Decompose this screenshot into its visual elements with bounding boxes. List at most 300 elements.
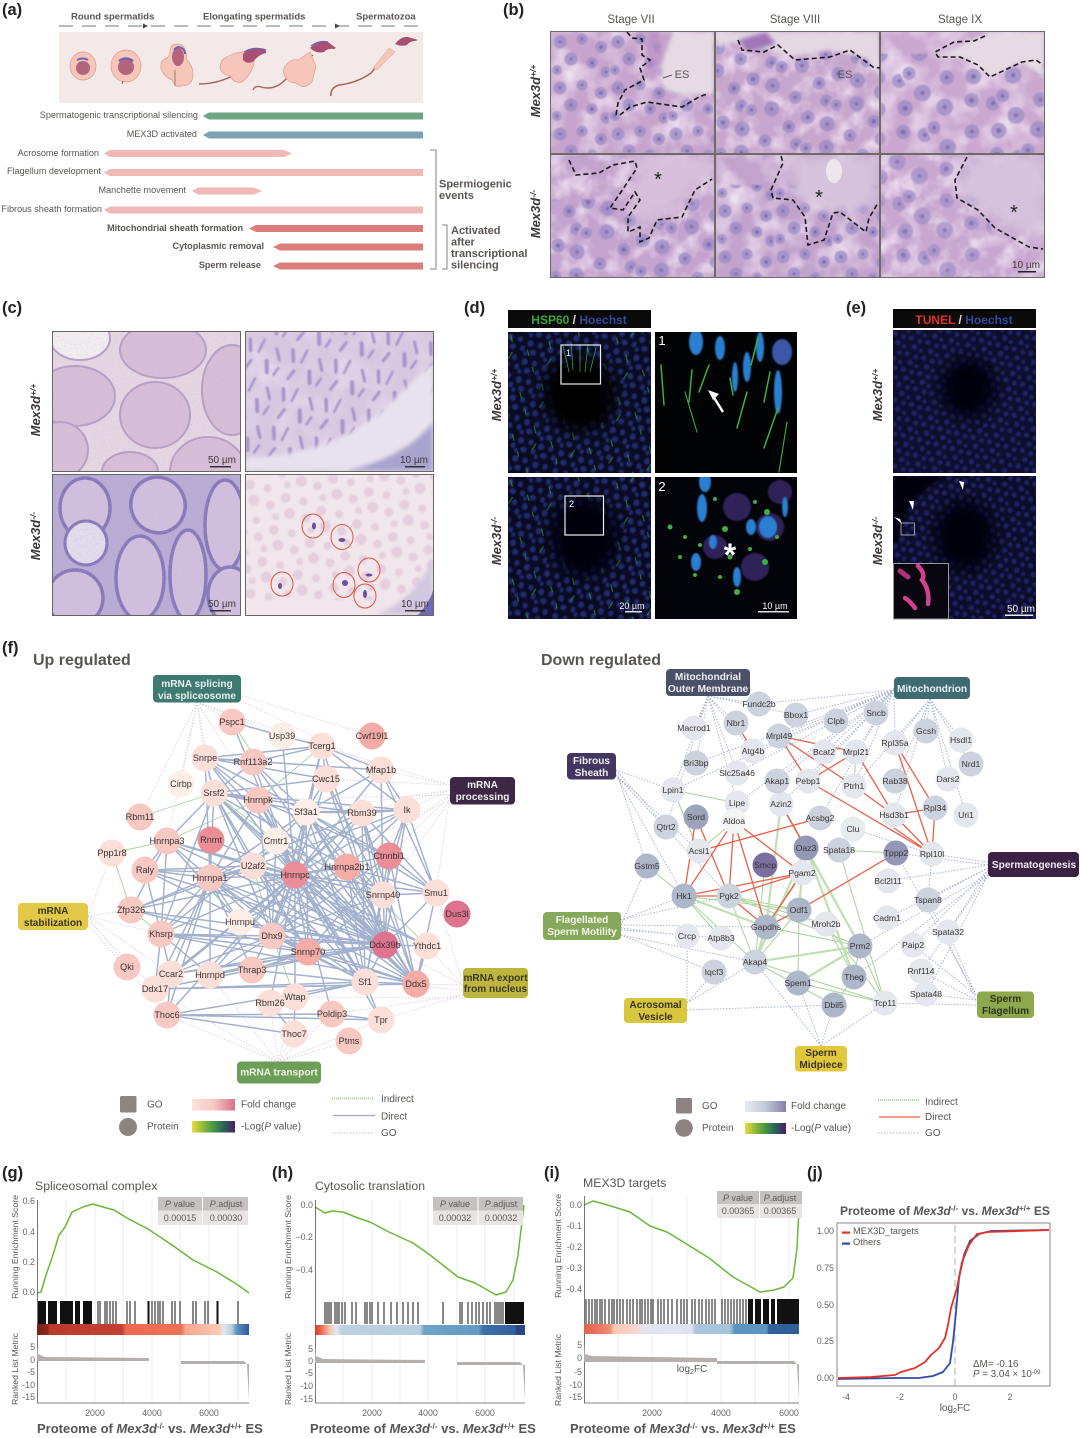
genotype labels [28, 384, 43, 560]
legend: up regulated: -Log(P value) [241, 1122, 301, 1132]
bracket labels: silencing [451, 260, 499, 272]
panel frames [550, 32, 1044, 278]
GO tag: mRNA splicing: mRNA splicing [161, 679, 233, 690]
panel label (c): (c) [2, 299, 22, 317]
ranking colour bar [315, 1325, 525, 1335]
legend: up regulated [119, 1094, 414, 1139]
protein nodes: Iqcf3 [705, 967, 724, 977]
protein nodes: Gapdhs [751, 922, 781, 932]
micrograph: wild type [893, 330, 1036, 473]
ranked list metric: -15 [300, 1394, 313, 1404]
arrowheads [894, 481, 964, 524]
protein nodes: U2af2 [241, 861, 265, 871]
protein nodes: Hnrnpk [243, 795, 273, 805]
x-axis title: ES [242, 1421, 263, 1436]
panel c: testis and epididymis histology [28, 316, 434, 626]
GO tag: spermatogenesis: Spermatogenesis [992, 860, 1076, 871]
stage headings [71, 12, 416, 22]
stain header: HSP60 / Hoechst [531, 313, 627, 327]
panel h: GSEA cytosolic translation [283, 1179, 536, 1436]
panel g: GSEA spliceosomal complex [10, 1179, 263, 1436]
stats table: P.adjust [485, 1199, 518, 1209]
GO tag: fibrous sheath: Sheath [575, 768, 608, 779]
grid lines [66, 1200, 238, 1403]
protein nodes: Ctnnbl1 [373, 851, 405, 861]
grid lines [343, 1200, 514, 1403]
GO tag: sperm flagellum: Flagellum [982, 1006, 1029, 1017]
label list: Fibrous sheath formation [1, 204, 102, 214]
axis ticks: 0.25 [817, 1336, 834, 1346]
stats table: P.adjust [764, 1193, 797, 1203]
protein nodes: Crcp [678, 931, 696, 941]
axes and score ticks [283, 1195, 525, 1403]
MEX3D targets curve [838, 1230, 1049, 1378]
ranked list metric [283, 1332, 525, 1418]
genotype labels: +/+ [528, 65, 538, 77]
protein nodes: Snrnp40 [366, 890, 400, 900]
axis ticks: 1.00 [817, 1226, 834, 1236]
GO tag: flagellated sperm motility: Flagellated [556, 915, 608, 926]
ranked list metric: -5 [574, 1367, 582, 1377]
legend: up regulated: Fold change [241, 1100, 296, 1110]
GO tag: fibrous sheath [567, 753, 616, 780]
protein nodes: Spata48 [910, 989, 942, 999]
protein nodes: Poldip3 [317, 1009, 347, 1019]
title: MEX3D targets [583, 1176, 666, 1190]
protein nodes: Dars2 [937, 774, 960, 784]
protein nodes: Odf1 [790, 905, 809, 915]
stats table: 0.00365 [764, 1206, 796, 1216]
axis ticks: 0.00 [817, 1373, 834, 1383]
label list: Sperm release [199, 260, 261, 270]
protein nodes: Ythdc1 [413, 941, 441, 951]
legend: down regulated: Fold change [791, 1101, 846, 1112]
micrograph: wild type overview [508, 332, 651, 473]
stats table: 0.00030 [210, 1213, 242, 1223]
protein nodes [97, 708, 470, 1054]
ranked list metric: log [677, 1364, 690, 1375]
label list: Spermatogenic transcriptional silencing [40, 110, 198, 120]
protein nodes: Rbm11 [126, 812, 154, 822]
running enrichment score curve [584, 1201, 799, 1292]
panel label (g): (g) [2, 1164, 23, 1182]
protein nodes: Smu1 [424, 888, 448, 898]
protein nodes: Raly [136, 865, 155, 875]
axis ticks: -2 [896, 1392, 904, 1402]
ranked list metric: -10 [569, 1380, 582, 1390]
dashed stage arrow [59, 24, 423, 28]
genotype labels: +/+ [489, 369, 499, 381]
GO tag: sperm flagellum: Sperm [990, 994, 1021, 1005]
stats table: P.adjust [210, 1199, 243, 1209]
title: Cytosolic translation [315, 1179, 425, 1193]
protein nodes: Fundc2b [742, 699, 776, 709]
protein nodes: Azin2 [770, 799, 792, 809]
genotype labels: -/- [870, 517, 880, 525]
GO tag: flagellated sperm motility: Sperm Motility [547, 927, 617, 938]
protein nodes: Hk1 [676, 891, 692, 901]
protein nodes: Sf1 [358, 977, 372, 987]
protein nodes: Atp8b3 [707, 933, 735, 943]
ranked list metric: 0 [308, 1356, 313, 1366]
GO tag: mRNA transport [237, 1062, 321, 1084]
panel frames [52, 332, 434, 616]
inset numbers: 2 [569, 499, 574, 509]
panel b: histology [528, 14, 1044, 281]
protein nodes: Nbr1 [727, 718, 746, 728]
GO tag: mRNA splicing [153, 675, 241, 702]
scale bars: 50 µm [208, 455, 236, 466]
protein nodes: Rpl34 [924, 803, 946, 813]
ranked list metric: 0 [577, 1353, 582, 1363]
GO tag: mRNA processing: mRNA [467, 780, 499, 791]
protein nodes: Tcerg1 [308, 741, 336, 751]
protein nodes: Sncb [866, 708, 886, 718]
protein nodes: Clu [847, 824, 860, 834]
protein nodes: Ptrh1 [844, 781, 864, 791]
GO tag: mRNA stabilization: stabilization [24, 918, 82, 929]
protein nodes: Smcp [754, 860, 776, 870]
grid lines [618, 1196, 789, 1403]
protein nodes: Snrnp70 [291, 947, 325, 957]
protein nodes: Theg [844, 972, 864, 982]
ranked list metric [553, 1333, 799, 1418]
GO tag: mRNA processing [450, 777, 515, 804]
legend: up regulated: GO [147, 1100, 163, 1110]
stats table: 0.00032 [485, 1213, 517, 1223]
GO tag: sperm midpiece: Midpiece [799, 1060, 843, 1071]
ranked list metric: -15 [22, 1392, 35, 1402]
title: ES [1031, 1204, 1050, 1218]
stats table: P value [440, 1199, 470, 1209]
GO tag: mRNA export: mRNA export [463, 973, 528, 984]
down-regulated network [543, 669, 1079, 1072]
panel label (b): (b) [503, 1, 524, 19]
genotype labels: -/- [528, 190, 538, 198]
legend: down regulated: GO [925, 1128, 941, 1139]
label list: Flagellum development [7, 166, 101, 176]
protein nodes: Sf3a1 [294, 807, 318, 817]
protein nodes: Tcp11 [874, 998, 896, 1008]
annotations ES and asterisks: ES [675, 69, 689, 81]
stats table [158, 1197, 248, 1225]
GO tag: spermatogenesis [988, 852, 1079, 877]
ranked list metric: 4000 [418, 1408, 438, 1418]
panel label (i): (i) [544, 1164, 560, 1182]
legend: MEX3D_targets [853, 1226, 919, 1236]
x-axis title: -/- [157, 1422, 165, 1431]
x-axis title: ES [775, 1421, 796, 1436]
protein nodes: Thoc6 [154, 1010, 180, 1020]
GO tag: acrosomal vesicle: Vesicle [638, 1012, 673, 1023]
protein nodes: Ptms [339, 1036, 360, 1046]
axes and score ticks: 0.0 [23, 1287, 35, 1297]
micrograph: stage VII knockout [551, 155, 714, 277]
scale bars: 50 µm [208, 599, 236, 610]
GO tag: mRNA transport: mRNA transport [240, 1068, 318, 1078]
micrograph: wild type high power [246, 332, 433, 471]
stage headings: Round spermatids [71, 12, 154, 22]
micrograph: stage IX wild type [881, 32, 1044, 153]
ranked list metric: 6000 [199, 1408, 219, 1418]
protein nodes: Rnf114 [907, 966, 935, 976]
stain header: TUNEL / Hoechst [915, 313, 1013, 327]
genotype labels: Mex3d [28, 396, 43, 436]
running enrichment score curve [315, 1205, 524, 1295]
protein nodes: Akap1 [765, 776, 789, 786]
heading: up regulated: Up regulated [33, 652, 131, 669]
stage headings: Spermatozoa [356, 12, 416, 22]
protein nodes: Slc25a46 [719, 768, 755, 778]
genotype labels: Mex3d [870, 525, 885, 565]
protein nodes: Ddx17 [142, 984, 168, 994]
up-regulated network [18, 675, 528, 1084]
x-axis title: Proteome of Mex3d [570, 1421, 690, 1436]
annotations ES and asterisks: * [654, 169, 662, 191]
zero reference line [954, 1225, 956, 1385]
protein nodes: Hnrnpa1 [193, 873, 227, 883]
stage headings: Elongating spermatids [203, 12, 305, 22]
axis title: FC [957, 1403, 970, 1414]
protein nodes: Tspan8 [914, 895, 942, 905]
ranked list metric: -5 [27, 1367, 35, 1377]
stain header [508, 310, 651, 328]
title: +/+ [1019, 1204, 1031, 1213]
red circles marking abnormal sperm [271, 514, 380, 608]
stage headings [607, 14, 982, 26]
protein nodes: Uri1 [958, 810, 974, 820]
micrograph: stage VII wild type [551, 32, 714, 153]
ranked list metric: 5 [30, 1342, 35, 1352]
axes and score ticks: Running Enrichment Score [553, 1194, 563, 1298]
protein nodes: Rnf113a2 [234, 757, 272, 767]
bracket labels: after [451, 236, 476, 248]
axes and score ticks: 0.0 [301, 1200, 313, 1210]
protein nodes: Qki [120, 962, 134, 972]
x-axis title: ES [515, 1421, 536, 1436]
GO tag: mRNA export [463, 968, 528, 998]
running enrichment score curve [37, 1204, 249, 1293]
stage headings: Stage IX [938, 14, 982, 26]
protein nodes: Bri3bp [684, 758, 709, 768]
axes and score ticks: 0.2 [23, 1257, 35, 1267]
protein nodes: Spata32 [932, 927, 964, 937]
ranked list metric: 2 [690, 1369, 694, 1376]
genotype labels [870, 369, 885, 565]
scale bars [619, 601, 789, 612]
panel j: cumulative distribution [817, 1204, 1050, 1415]
micrograph: stage IX knockout [881, 155, 1044, 277]
stain header [893, 309, 1036, 328]
brackets [430, 150, 447, 269]
x-axis title: Mex3d [463, 1421, 504, 1436]
inset numbers: 1 [566, 348, 571, 358]
protein nodes: Prm2 [850, 941, 870, 951]
protein nodes: Ppp1r8 [97, 848, 127, 858]
protein nodes: Ik [403, 805, 411, 815]
protein nodes: Hnrnpa2b1 [324, 862, 370, 872]
GO tag: mitochondrion [894, 677, 970, 699]
ranked list metric: 5 [308, 1344, 313, 1354]
protein nodes: Thoc7 [281, 1029, 307, 1039]
statistics annotation: -09 [1032, 1370, 1041, 1376]
legend: up regulated: GO [381, 1128, 397, 1139]
protein nodes: Oaz3 [796, 843, 816, 853]
ranked list metric: 2000 [642, 1408, 662, 1418]
protein nodes: Akap4 [743, 957, 767, 967]
sperm development illustration [59, 32, 423, 103]
ranked list metric [10, 1332, 249, 1418]
protein nodes: Nrd1 [962, 759, 981, 769]
GO tag: acrosomal vesicle [624, 998, 687, 1023]
stats table [433, 1197, 523, 1225]
GO tag: mitochondrial outer membrane: Outer Membrane [668, 684, 748, 695]
genotype labels: Mex3d [528, 198, 543, 238]
panel e: TUNEL staining [870, 309, 1036, 619]
protein nodes: Lipe [729, 798, 745, 808]
inset numbers [566, 333, 666, 509]
label list: MEX3D activated [127, 129, 197, 139]
direct edges [684, 723, 935, 927]
ranked list metric: 2000 [362, 1408, 382, 1418]
GO tag: fibrous sheath: Fibrous [573, 756, 610, 767]
scale bars [208, 455, 429, 612]
legend [842, 1226, 919, 1247]
title: Mex3d [982, 1204, 1020, 1218]
genotype labels: Mex3d [28, 520, 43, 560]
GO tag: mRNA stabilization [18, 903, 88, 930]
protein nodes: Hnrnpu [225, 917, 255, 927]
protein nodes: Srsf2 [203, 788, 225, 798]
axes and score ticks: -0.4 [567, 1284, 582, 1294]
protein nodes: Rpl35a [881, 738, 909, 748]
protein nodes: Spata18 [823, 845, 855, 855]
scale bar: 50 µm [1007, 604, 1035, 615]
statistics annotation: ΔM= -0.16 [973, 1359, 1019, 1370]
statistics annotation [973, 1359, 1041, 1380]
genotype labels: Mex3d [528, 77, 543, 117]
protein nodes: Qtrt2 [656, 822, 676, 832]
axes and score ticks: 0.6 [23, 1196, 35, 1206]
label list: Acrosome formation [18, 148, 99, 158]
micrograph: knockout high power [246, 475, 433, 615]
axes and score ticks [10, 1195, 249, 1403]
protein nodes: Cirbp [170, 779, 192, 789]
protein nodes: Ddx5 [405, 979, 427, 989]
axes and score ticks: 0.0 [570, 1200, 582, 1210]
ranked list metric: Ranked List Metric [553, 1333, 563, 1406]
axes and score ticks: 0.4 [23, 1227, 35, 1237]
direct edges [131, 722, 436, 1034]
micrograph: knockout overview [508, 477, 651, 619]
protein nodes: Atg4b [742, 746, 764, 756]
ranked list metric: 5 [577, 1340, 582, 1350]
protein nodes: Rnmt [200, 835, 222, 845]
ranked list metric: Ranked List Metric [283, 1332, 293, 1405]
protein nodes: Pgam2 [788, 868, 816, 878]
legend: down regulated [675, 1097, 958, 1139]
annotations ES and asterisks: * [1010, 202, 1018, 224]
micrograph: wild type low power [53, 332, 240, 471]
protein nodes: Snrpe [193, 753, 217, 763]
protein nodes: Thrap3 [238, 965, 266, 975]
GO tag: mitochondrion: Mitochondrion [897, 684, 967, 695]
x-axis title: +/+ [230, 1422, 242, 1431]
protein nodes: Khsrp [149, 929, 173, 939]
ranked list metric: 6000 [475, 1408, 495, 1418]
stats table: 0.00015 [164, 1213, 196, 1223]
x-axis title: +/+ [763, 1422, 775, 1431]
protein nodes: Spem1 [784, 978, 812, 988]
axes and score ticks: −0.2 [295, 1232, 313, 1242]
protein nodes: Acsl1 [688, 846, 710, 856]
axes and score ticks: Running Enrichment Score [10, 1195, 20, 1299]
GO tag: mRNA export: from nucleus [464, 984, 528, 995]
ranked list metric: -15 [569, 1392, 582, 1402]
GO tag: mRNA processing: processing [456, 792, 509, 803]
label list: Manchette movement [99, 185, 186, 195]
protein nodes: Hnrnpa3 [150, 836, 184, 846]
legend: down regulated: Protein [702, 1123, 734, 1134]
protein nodes: Cwf19l1 [356, 731, 388, 741]
protein nodes: Rpl10l [920, 849, 944, 859]
panel label (h): (h) [272, 1164, 293, 1182]
bracket labels: Spermiogenic [439, 178, 512, 190]
genotype labels: -/- [28, 512, 38, 520]
micrograph: inset 2 [655, 477, 797, 619]
axes and score ticks: −0.4 [295, 1265, 313, 1275]
x-axis title: Mex3d [723, 1421, 764, 1436]
protein nodes: Hsdl1 [950, 735, 972, 745]
scale bars: 20 µm [619, 601, 645, 611]
legend: down regulated: -Log(P value) [791, 1123, 851, 1134]
arrow [708, 390, 723, 412]
GO edges [88, 695, 463, 1062]
panel d: HSP60 immunofluorescence [489, 310, 797, 619]
axis ticks: -4 [842, 1392, 850, 1402]
protein nodes: Bcat2 [813, 747, 835, 757]
stats table: P value [723, 1193, 753, 1203]
ranking colour bar [37, 1324, 249, 1335]
title: -/- [951, 1204, 959, 1213]
title: Spliceosomal complex [35, 1179, 158, 1193]
genotype labels: Mex3d [489, 381, 504, 421]
legend: down regulated: Direct [925, 1112, 951, 1123]
x-axis title: vs. [698, 1421, 723, 1436]
annotations ES and asterisks: ES [838, 69, 852, 81]
ranked list metric: 4000 [142, 1408, 162, 1418]
panel label (f): (f) [2, 639, 18, 657]
axis ticks [817, 1226, 1013, 1402]
dashed seminiferous boundaries [569, 32, 1043, 249]
axes and score ticks: -0.3 [567, 1263, 582, 1273]
protein nodes: Cwc15 [312, 774, 340, 784]
genotype labels: +/+ [28, 384, 38, 396]
panel a: spermiogenesis timeline [1, 12, 527, 272]
legend: down regulated: GO [702, 1101, 718, 1112]
axis ticks: 0 [953, 1392, 958, 1402]
genotype labels: -/- [489, 517, 499, 525]
axes and score ticks: Running Enrichment Score [283, 1195, 293, 1299]
asterisk: * [724, 537, 737, 573]
genotype labels [489, 369, 504, 565]
bracket labels: events [439, 190, 474, 202]
legend: up regulated: Direct [381, 1112, 407, 1122]
micrograph: stage VIII wild type [716, 32, 879, 153]
protein nodes: Wtap [284, 992, 306, 1002]
axes and score ticks: -0.2 [567, 1242, 582, 1252]
plot frame [837, 1223, 1050, 1386]
